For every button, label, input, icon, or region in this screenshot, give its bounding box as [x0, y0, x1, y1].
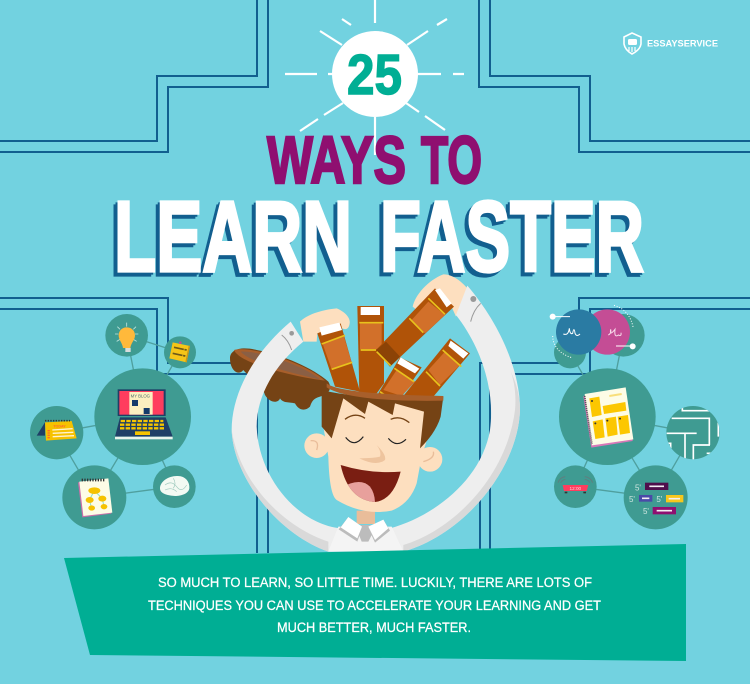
- icon: light bulb: [115, 323, 138, 352]
- right icon cluster: [550, 305, 720, 529]
- icon: five-minute blocks: 5': [643, 507, 649, 516]
- icon: five-minute blocks: 5': [629, 495, 635, 504]
- banner: [64, 544, 686, 661]
- books: [317, 288, 470, 397]
- banner text: [148, 575, 601, 635]
- book 2: [357, 306, 384, 393]
- hair flap lid: [230, 348, 330, 410]
- title: ways to: WAYS: [267, 123, 406, 198]
- ear details: [311, 441, 434, 462]
- book 5: [403, 338, 470, 397]
- icon: sticky note: [169, 341, 190, 362]
- book 3: [376, 288, 454, 367]
- ears: [304, 433, 442, 472]
- face: [323, 398, 440, 512]
- logo: EssayService: [624, 33, 718, 54]
- icon: planner notebook: [583, 387, 633, 448]
- icon: alarm clock: [558, 477, 593, 493]
- icon: five-minute blocks: [629, 483, 683, 516]
- icon: brain: [160, 476, 189, 496]
- book 4: [378, 357, 422, 397]
- icon: laptop: [115, 389, 173, 439]
- mouth: [340, 465, 401, 503]
- banner text: MUCH BETTER, MUCH FASTER.: [277, 620, 471, 635]
- title: learn faster: LEARN: [110, 185, 348, 297]
- collar: [339, 517, 390, 543]
- icon: notebook: [78, 478, 112, 517]
- character: student pulling books into head: [230, 274, 520, 552]
- arms and shirt: [232, 286, 520, 552]
- banner text: SO MUCH TO LEARN, SO LITTLE TIME. LUCKILY, THERE ARE LOTS OF: [158, 575, 592, 590]
- title: ways to: TO: [421, 123, 482, 198]
- sunburst rays: [285, 0, 464, 155]
- icon: alarm clock: 12:00: [570, 486, 582, 491]
- title: learn faster: [110, 181, 644, 297]
- icon: maze: [665, 407, 720, 462]
- nose: [359, 445, 385, 463]
- badge: 25: 25: [347, 43, 402, 107]
- icon: five-minute blocks: 5': [635, 484, 641, 493]
- logo: EssayService: ESSAYSERVICE: [647, 38, 718, 48]
- title: learn faster: LEARN: [112, 183, 350, 295]
- hands: [300, 274, 467, 342]
- title: learn faster: LEARN: [114, 181, 352, 293]
- neck: [357, 511, 375, 524]
- icon: calendar: [37, 421, 77, 441]
- banner text: TECHNIQUES YOU CAN USE TO ACCELERATE YOUR LEARNING AND GET: [148, 598, 601, 613]
- left icon cluster: [30, 314, 196, 529]
- icon: five-minute blocks: 5': [656, 495, 663, 504]
- badge: 25: [332, 31, 418, 117]
- book 1: [317, 323, 360, 392]
- eyes and brows: [345, 415, 409, 444]
- hair: [322, 390, 443, 448]
- icon: calendar: TODAY: [53, 424, 66, 428]
- icon: laptop: MY BLOG: [131, 394, 151, 399]
- icon: overlapping handwriting bubbles: [550, 305, 636, 358]
- head opening rim: [327, 383, 443, 401]
